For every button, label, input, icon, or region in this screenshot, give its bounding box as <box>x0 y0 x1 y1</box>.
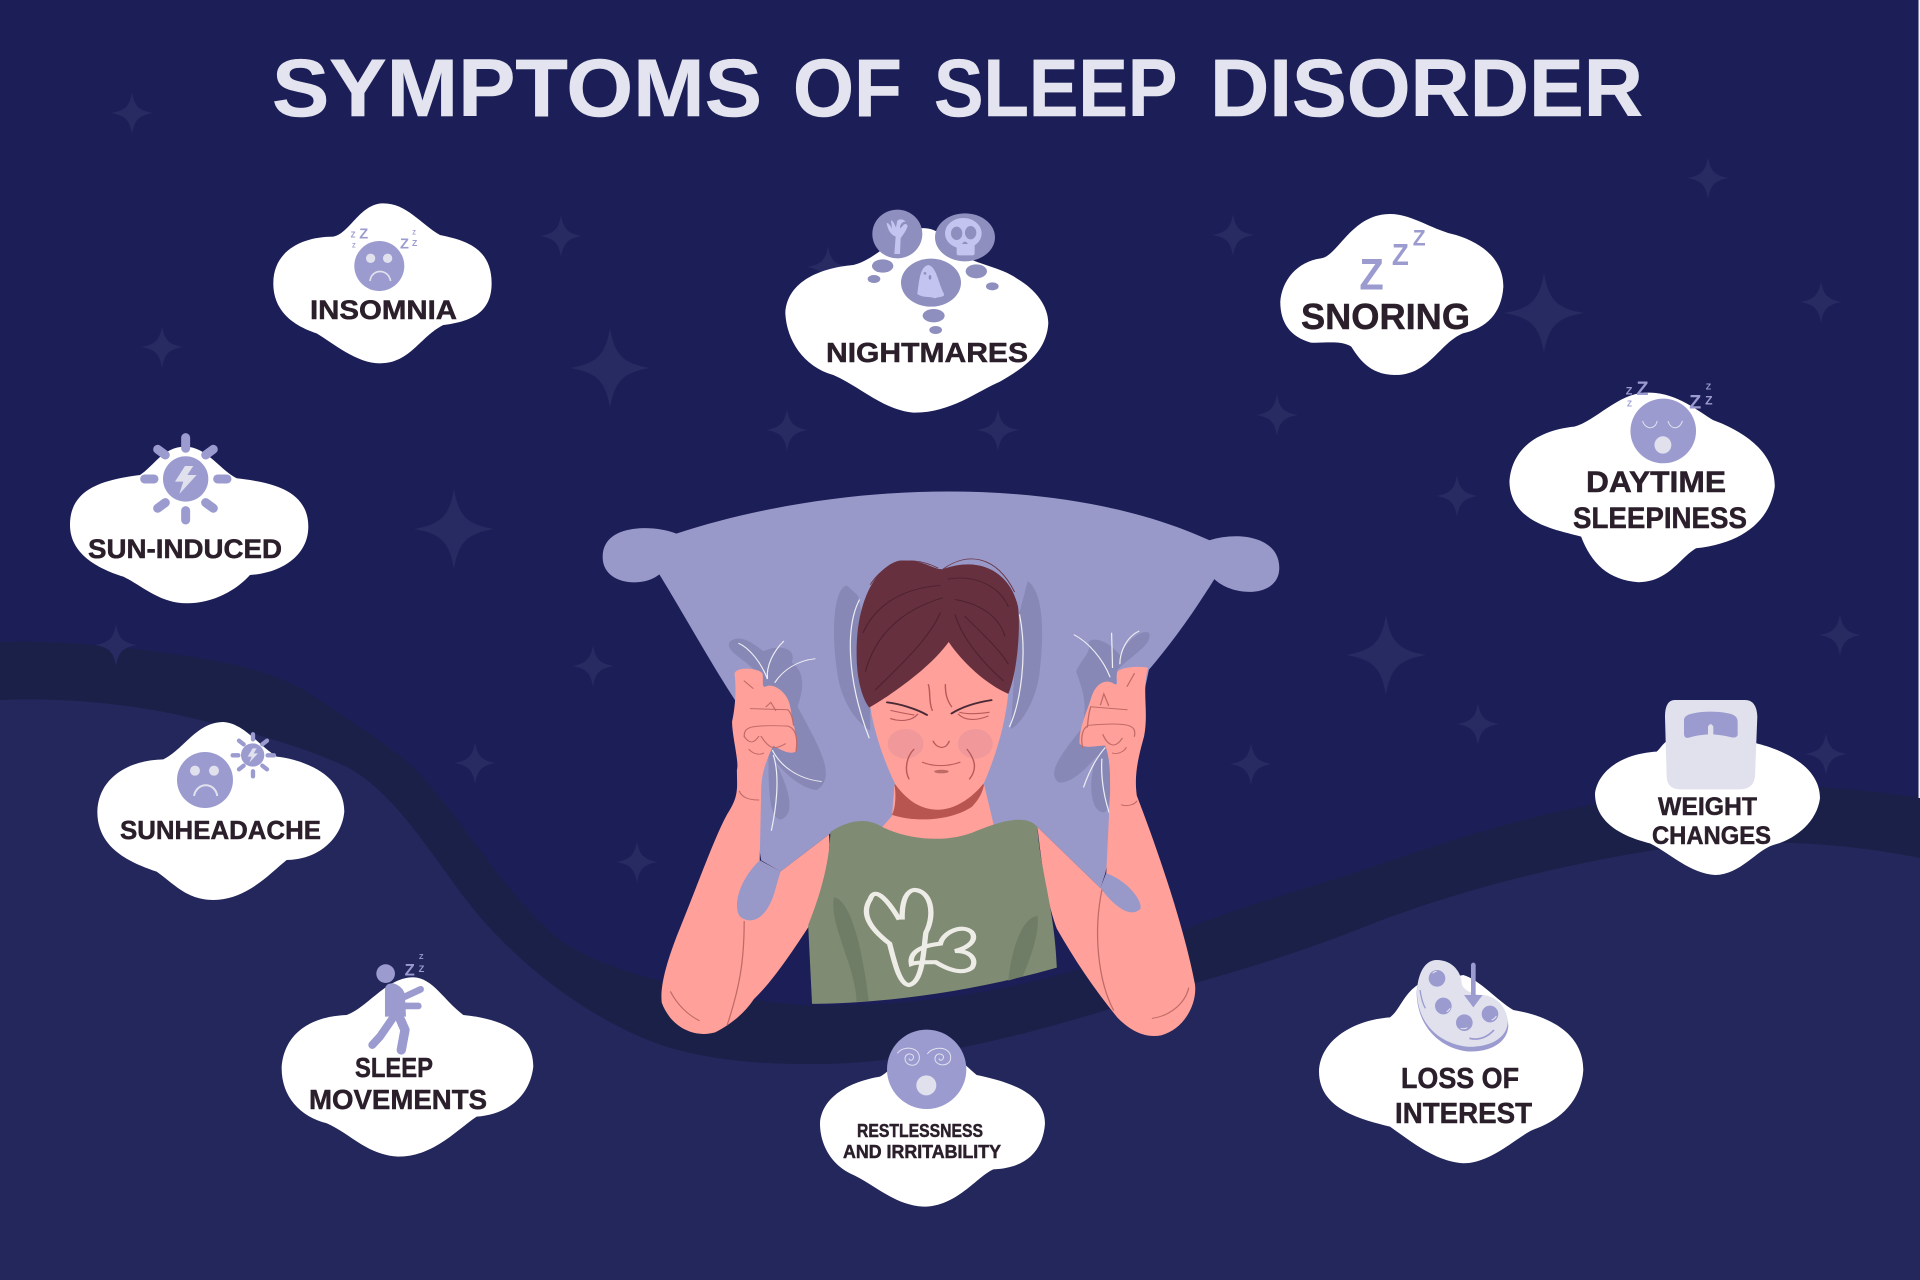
icon: z letters: Z <box>1392 238 1409 272</box>
label: LOSS OF <box>1401 1063 1519 1095</box>
icon: yawning face with z's: Z <box>1706 381 1712 391</box>
dark wave band <box>0 642 1920 1280</box>
cloud <box>820 1043 1045 1207</box>
icon: sad face with small sun <box>177 734 274 808</box>
shirt <box>808 820 1057 1004</box>
pillow wrinkles <box>729 581 1150 820</box>
cloud <box>1509 393 1775 582</box>
panel: sunheadache <box>97 722 344 900</box>
label: SNORING <box>1301 296 1470 337</box>
panel: insomnia <box>273 203 492 363</box>
cloud <box>97 722 344 900</box>
label: SLEEP <box>355 1052 433 1083</box>
icon: dizzy face <box>887 1030 966 1109</box>
panel: nightmares <box>785 210 1048 413</box>
pillow corners over arms <box>737 860 1141 920</box>
hair <box>857 559 1019 708</box>
icon: sleepwalking figure: Z <box>419 964 425 974</box>
icon: sad face with z's: Z <box>359 226 368 242</box>
label line 2: MOVEMENTS <box>309 1084 487 1115</box>
icon: sad face with z's: Z <box>412 230 416 236</box>
label line 2: SLEEPINESS <box>1573 502 1747 535</box>
cloud <box>70 447 308 603</box>
panel: restlessness and irritability <box>820 1030 1045 1207</box>
lower wave <box>0 699 1920 1280</box>
label: RESTLESSNESS <box>857 1121 983 1141</box>
panel: daytime sleepiness <box>1509 378 1775 582</box>
label line 2: AND IRRITABILITY <box>843 1142 1001 1162</box>
cloud <box>282 977 533 1157</box>
icon: sleepwalking figure: Z <box>405 961 415 980</box>
icon: z letters <box>1359 226 1426 299</box>
cloud <box>785 228 1048 413</box>
label: SUN-INDUCED <box>88 534 282 564</box>
white feather strands <box>738 600 1139 831</box>
panel: weight changes <box>1595 700 1820 875</box>
panel: sun-induced <box>70 438 308 603</box>
icon: sad face with z's: Z <box>400 237 409 253</box>
icon: sad face with z's: Z <box>412 238 418 248</box>
icon: sad face with z's: Z <box>352 243 356 249</box>
icon: yawning face with z's <box>1626 378 1713 463</box>
title: SYMPTOMS <box>272 43 762 134</box>
icon: yawning face with z's: Z <box>1626 386 1633 398</box>
icon: sad face with z's: Z <box>351 230 356 239</box>
icon: yawning face with z's: Z <box>1637 378 1649 400</box>
icon: thought bubbles with hand, skull, ghost <box>868 210 999 334</box>
cloud <box>273 203 492 363</box>
left arm <box>661 669 829 1034</box>
label: WEIGHT <box>1658 793 1757 821</box>
hand and arm lines <box>671 674 1189 1025</box>
icon: z letters: Z <box>1359 249 1384 299</box>
icon: yawning face with z's: Z <box>1689 391 1701 413</box>
title: DISORDER <box>1210 43 1643 134</box>
title: OF <box>793 43 902 134</box>
icon: bathroom scale <box>1665 700 1757 789</box>
icon: sad face with z's <box>351 226 418 291</box>
icon: sleepwalking figure: Z <box>419 952 424 961</box>
neck <box>882 784 994 847</box>
cloud <box>1280 214 1503 375</box>
icon: yawning face with z's: Z <box>1705 394 1713 408</box>
illustration: woman gripping pillow <box>603 491 1279 1036</box>
right arm <box>1037 667 1195 1036</box>
label: SUNHEADACHE <box>120 815 321 845</box>
panel: sleep movements <box>282 952 533 1157</box>
pillow <box>603 491 1279 888</box>
label line 2: INTEREST <box>1395 1098 1532 1130</box>
panel: snoring <box>1280 214 1503 375</box>
icon: z letters: Z <box>1413 226 1426 251</box>
title: SLEEP <box>934 43 1176 134</box>
neck shadow <box>892 784 984 819</box>
label line 2: CHANGES <box>1652 822 1771 850</box>
cloud <box>1319 975 1583 1163</box>
label: DAYTIME <box>1586 466 1726 499</box>
cloud <box>1595 730 1820 875</box>
icon: sun with lightning bolt <box>145 438 227 520</box>
background stars <box>95 92 1861 883</box>
label: NIGHTMARES <box>826 337 1028 368</box>
icon: sleepwalking figure <box>372 952 425 1050</box>
face <box>870 636 1008 810</box>
icon: yawning face with z's: Z <box>1627 400 1632 409</box>
label: INSOMNIA <box>310 295 457 325</box>
icon: paint palette with down arrow <box>1417 960 1508 1051</box>
panel: loss of interest <box>1319 960 1583 1163</box>
